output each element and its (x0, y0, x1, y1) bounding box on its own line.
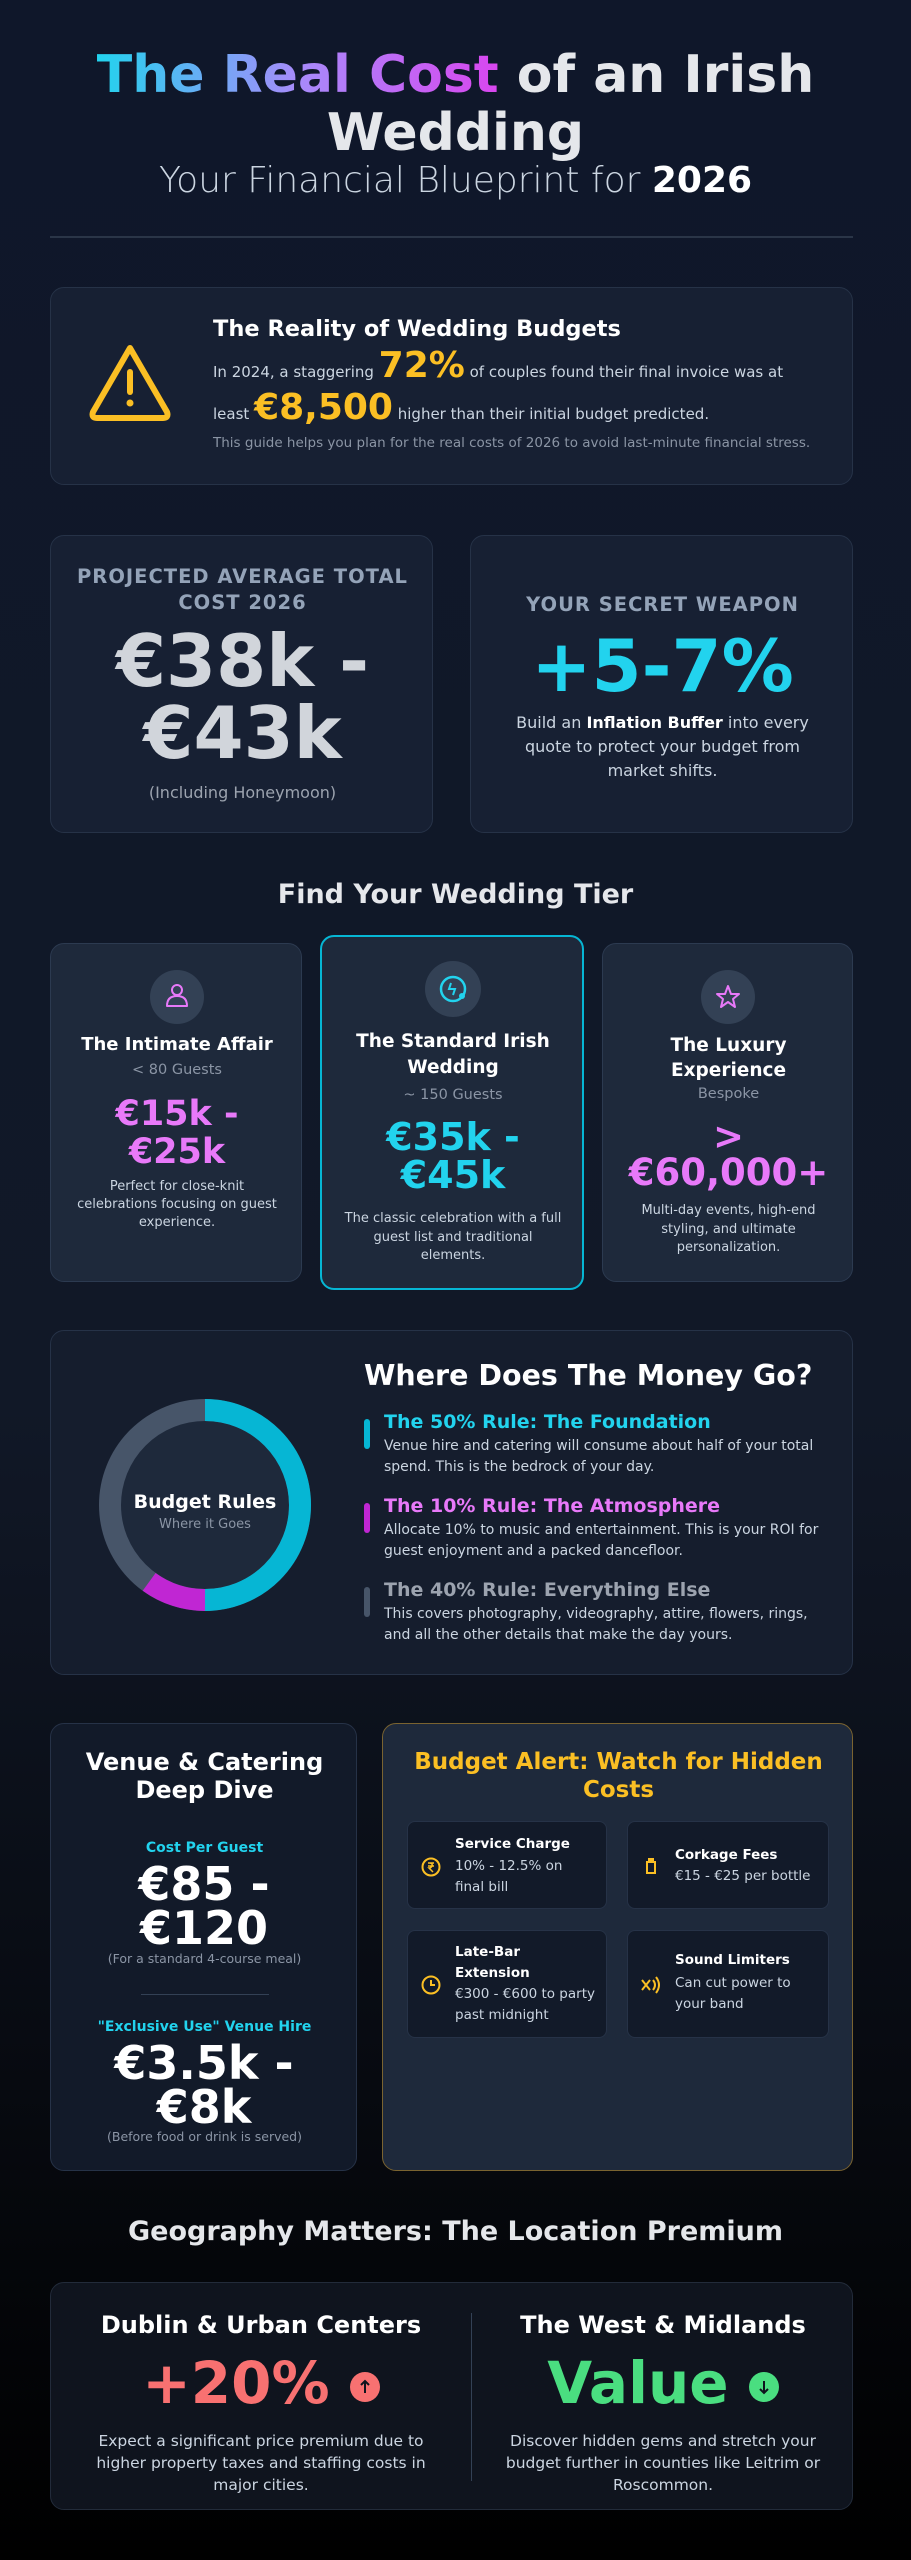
item: corkage: Corkage Fees (675, 1847, 777, 1863)
rule 10: The 10% Rule: The Atmosphere (384, 1495, 720, 1517)
panel: budget alert: Budget Alert: Watch for Hidden Costs (414, 1749, 823, 1803)
donut chart (99, 1399, 311, 1611)
panel: standard tier: The classic celebration with a full guest list and traditional elements. (345, 1211, 561, 1263)
panel: intimate tier (50, 943, 302, 1282)
panel: luxury tier (602, 943, 853, 1282)
title: The Real Cost of an Irish Wedding (97, 45, 814, 163)
icon: rings (425, 961, 481, 1017)
panel: intimate tier: Perfect for close-knit celebrations focusing on guest experience. (77, 1179, 277, 1230)
rule 40: This covers photography, videography, attire, flowers, rings, and all the other details that make the day yours. (384, 1606, 808, 1643)
donut chart: Budget Rules (134, 1491, 276, 1513)
icon: person (150, 970, 204, 1024)
rule 10 (364, 1495, 818, 1559)
item: late bar: €300 - €600 to party past midnight (455, 1986, 595, 2023)
big number: +5-7% (531, 624, 794, 708)
panel: standard tier: €45k (401, 1153, 505, 1197)
panel: projected cost: (Including Honeymoon) (149, 783, 336, 802)
rule 50 (364, 1411, 813, 1475)
panel: luxury tier: > (713, 1115, 744, 1158)
panel: luxury tier: The Luxury (670, 1035, 787, 1056)
panel: standard tier: ~ 150 Guests (403, 1087, 503, 1103)
panel: venue & catering: Venue & Catering Deep Dive (86, 1748, 323, 1804)
heading: geography: Geography Matters: The Location Premium (128, 2216, 783, 2247)
panel: intimate tier: €25k (129, 1132, 225, 1172)
panel: venue & catering: "Exclusive Use" Venue Hire (98, 2019, 311, 2035)
heading: tiers: Find Your Wedding Tier (278, 879, 633, 910)
item: sound limiters: Can cut power to your band (675, 1975, 791, 2012)
rule 40 (364, 1579, 808, 1643)
region: dublin (96, 2311, 426, 2494)
item: corkage (627, 1821, 829, 1909)
text block: In 2024, a staggering 72% of couples found their final invoice was at least €8,500 higher than their initial budget predicted. (213, 345, 783, 428)
heading: The Reality of Wedding Budgets (213, 316, 621, 342)
panel: where does the money go (50, 1330, 853, 1675)
region: west: Value (547, 2349, 729, 2417)
donut chart: Where it Goes (159, 1517, 251, 1532)
item: late bar (407, 1930, 607, 2038)
item: service charge (407, 1821, 607, 1909)
region: west: Discover hidden gems and stretch your budget further in counties like Leitrim or Roscommon. (506, 2432, 820, 2494)
big number: €38k - €43k (116, 619, 369, 775)
footnote: This guide helps you plan for the real costs of 2026 to avoid last-minute financial stress. (213, 435, 810, 451)
panel: secret weapon (470, 535, 853, 833)
panel: projected cost: PROJECTED AVERAGE TOTAL COST 2026 (77, 565, 408, 614)
region: dublin: +20% (142, 2349, 330, 2417)
region: dublin: Expect a significant price premium due to higher property taxes and staffing costs in major cities. (96, 2432, 426, 2494)
item: service charge: 10% - 12.5% on final bill (455, 1858, 562, 1895)
panel: standard tier: €35k - (386, 1115, 520, 1159)
rule 50: The 50% Rule: The Foundation (384, 1411, 711, 1433)
panel: venue & catering: Cost Per Guest (146, 1840, 263, 1856)
item: late bar: Late-Bar Extension (455, 1944, 530, 1981)
item: corkage: €15 - €25 per bottle (675, 1868, 810, 1884)
item: service charge: Service Charge (455, 1836, 570, 1852)
heading: Where Does The Money Go? (364, 1359, 812, 1392)
panel: intimate tier: < 80 Guests (132, 1062, 222, 1078)
panel: venue & catering (50, 1723, 357, 2171)
panel: luxury tier: Experience (671, 1060, 786, 1081)
panel: luxury tier: Multi-day events, high-end styling, and ultimate personalization. (641, 1203, 816, 1255)
panel: secret weapon: YOUR SECRET WEAPON (526, 593, 799, 616)
panel: venue & catering: (For a standard 4-course meal) (108, 1951, 301, 1966)
item: sound limiters: Sound Limiters (675, 1952, 790, 1968)
region: west: The West & Midlands (520, 2311, 806, 2339)
panel: venue & catering: (Before food or drink is served) (107, 2129, 302, 2144)
item: sound limiters (627, 1930, 829, 2038)
panel: luxury tier: Bespoke (698, 1086, 759, 1102)
icon: warning (90, 345, 170, 421)
rule 10: Allocate 10% to music and entertainment. This is your ROI for guest enjoyment and a packed dancefloor. (384, 1522, 818, 1559)
region: dublin: Dublin & Urban Centers (101, 2311, 421, 2339)
panel: standard tier: The Standard Irish Wedding (356, 1031, 550, 1078)
panel: venue & catering: €85 - €120 (138, 1857, 270, 1955)
panel: standard tier (320, 935, 584, 1290)
icon: star (701, 970, 755, 1024)
panel: intimate tier: €15k - (115, 1094, 239, 1134)
panel: luxury tier: €60,000+ (629, 1151, 828, 1194)
subtitle: Your Financial Blueprint for 2026 (159, 160, 752, 201)
panel: projected cost (50, 535, 433, 833)
rule 50: Venue hire and catering will consume about half of your total spend. This is the bedrock of your day. (384, 1438, 813, 1475)
rule 40: The 40% Rule: Everything Else (384, 1579, 710, 1601)
panel: budget alert (382, 1723, 853, 2171)
panel: geography (50, 2282, 853, 2510)
panel: reality of budgets (50, 287, 853, 485)
panel: secret weapon: Build an Inflation Buffer into every quote to protect your budget from market shifts. (516, 713, 809, 780)
panel: intimate tier: The Intimate Affair (81, 1034, 273, 1055)
panel: venue & catering: €3.5k - €8k (114, 2036, 294, 2134)
region: west (506, 2311, 820, 2494)
